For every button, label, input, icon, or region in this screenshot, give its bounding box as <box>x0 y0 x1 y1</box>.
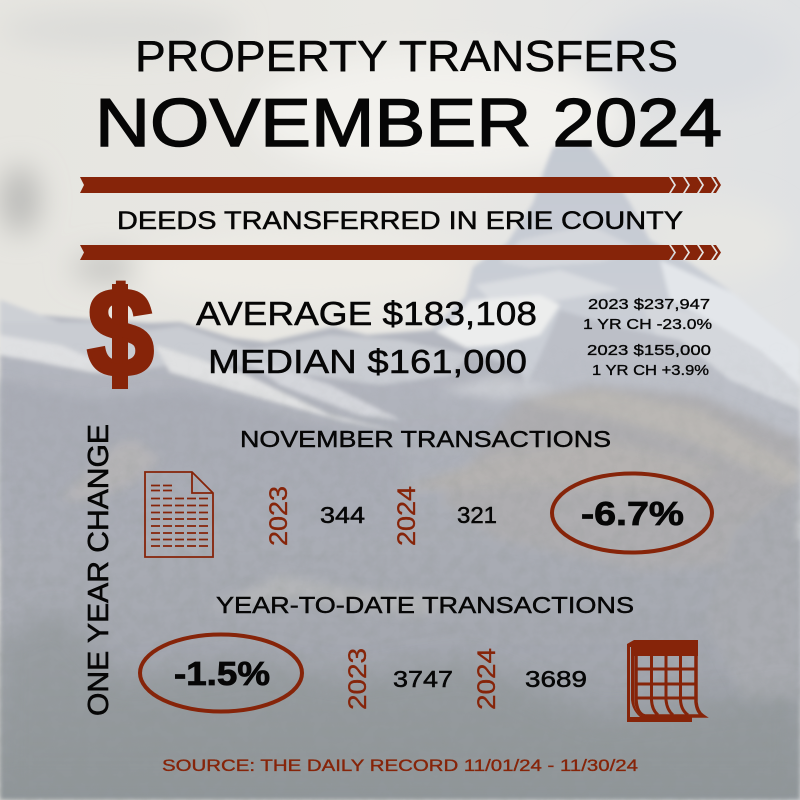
icon: document <box>145 472 213 557</box>
source line: SOURCE: THE DAILY RECORD 11/01/24 - 11/30/24 <box>162 757 638 775</box>
average comparison: 1 YR CH -23.0% <box>583 316 712 333</box>
callout: year-to-date change: -1.5% <box>174 655 270 692</box>
icon: calendar <box>627 640 703 722</box>
bottom arrow banner <box>80 245 721 260</box>
median price: MEDIAN $161,000 <box>208 343 527 380</box>
side label: one year change: ONE YEAR CHANGE <box>83 424 115 716</box>
average comparison <box>583 296 712 333</box>
callout: november change: -6.7% <box>581 495 684 532</box>
median comparison: 1 YR CH +3.9% <box>592 362 709 379</box>
median comparison <box>587 342 711 379</box>
main peak <box>420 143 800 520</box>
left range and valley <box>0 300 800 800</box>
icon: dollar sign: $ <box>87 262 154 403</box>
subtitle: DEEDS TRANSFERRED IN ERIE COUNTY <box>117 207 683 235</box>
november 2023 year label: 2023 <box>265 486 293 546</box>
november 2024 value: 321 <box>457 502 497 528</box>
ytd 2023 year label: 2023 <box>344 648 372 710</box>
ytd 2024 value: 3689 <box>525 666 587 692</box>
top arrow banner <box>80 177 721 193</box>
average comparison: 2023 $237,947 <box>588 296 710 313</box>
callout: year-to-date change <box>140 634 302 712</box>
callout: november change <box>552 474 712 552</box>
title line 2: NOVEMBER 2024 <box>95 85 722 161</box>
title line 1: PROPERTY TRANSFERS <box>135 32 678 81</box>
november 2024 year label: 2024 <box>393 486 421 546</box>
ytd 2024 year label: 2024 <box>473 648 501 710</box>
average price: AVERAGE $183,108 <box>196 295 537 332</box>
heading: november transactions: NOVEMBER TRANSACTIONS <box>240 426 611 452</box>
ytd 2023 value: 3747 <box>393 666 453 692</box>
heading: year-to-date transactions: YEAR-TO-DATE TRANSACTIONS <box>216 592 634 618</box>
median comparison: 2023 $155,000 <box>587 342 711 359</box>
november 2023 value: 344 <box>320 502 365 528</box>
texture <box>0 606 232 654</box>
